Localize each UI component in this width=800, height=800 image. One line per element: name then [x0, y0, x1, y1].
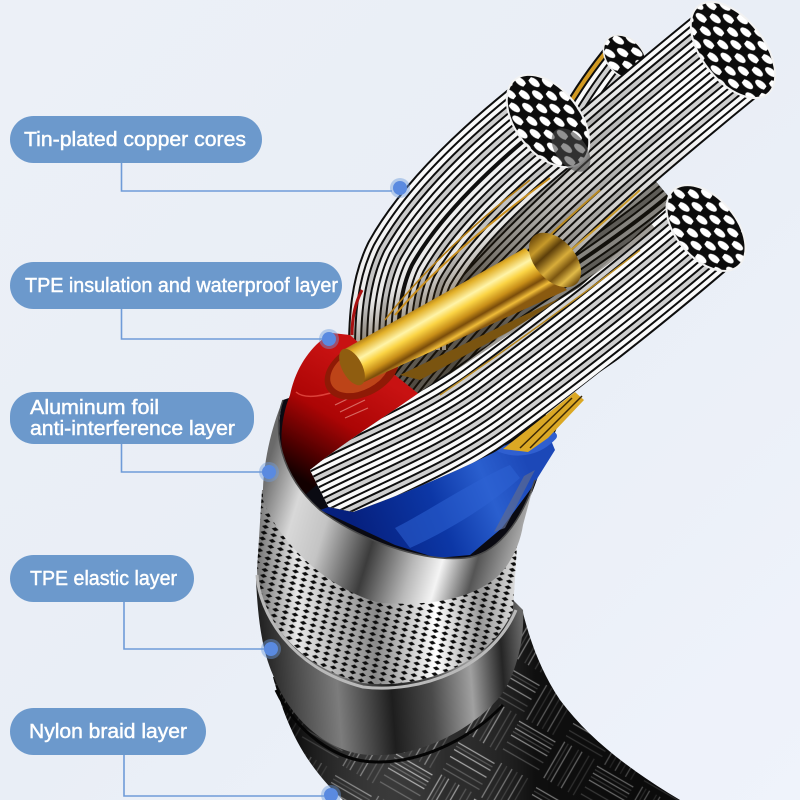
- label: tin-plated copper cores: Tin-plated copper cores: [24, 129, 246, 151]
- lower metal band: [256, 580, 523, 762]
- label: TPE elastic layer: [10, 555, 194, 602]
- connector: TPE elastic layer: [124, 602, 281, 659]
- front bundle end face: [651, 170, 761, 286]
- label: nylon braid layer: [10, 708, 206, 755]
- connector: tin-plated copper cores: [122, 163, 410, 198]
- shadowed strands behind bundles: [420, 196, 668, 372]
- label: aluminum foil anti-interference layer: anti-interference layer: [30, 418, 235, 440]
- connector: aluminum foil layer: [122, 444, 279, 482]
- red insulated wire: [281, 328, 420, 495]
- cable interior: [279, 360, 560, 559]
- rear tin-plated bundle: [380, 0, 792, 400]
- connector: TPE insulation layer: [122, 309, 339, 349]
- small rear copper bundle: [578, 26, 655, 125]
- label: tin-plated copper cores: [10, 116, 262, 163]
- front-left tin-plated bundle: [352, 60, 606, 350]
- gold core of blue wire: [503, 392, 584, 452]
- label: aluminum foil anti-interference layer: [10, 392, 254, 444]
- front-right tin-plated bundle: [320, 222, 706, 490]
- label: aluminum foil anti-interference layer: Aluminum foil: [30, 397, 159, 419]
- upper metal band: [263, 400, 535, 604]
- knurled metal ring: [257, 490, 518, 688]
- label: nylon braid layer: Nylon braid layer: [29, 721, 187, 743]
- gold copper core: [334, 223, 591, 389]
- label: TPE elastic layer: TPE elastic layer: [30, 568, 177, 590]
- label: TPE insulation and waterproof layer: TPE insulation and waterproof layer: [25, 275, 338, 297]
- connector: nylon braid layer: [124, 755, 341, 800]
- label: TPE insulation and waterproof layer: [10, 262, 342, 309]
- blue insulated wire: [320, 433, 555, 558]
- nylon braid layer: [273, 613, 680, 800]
